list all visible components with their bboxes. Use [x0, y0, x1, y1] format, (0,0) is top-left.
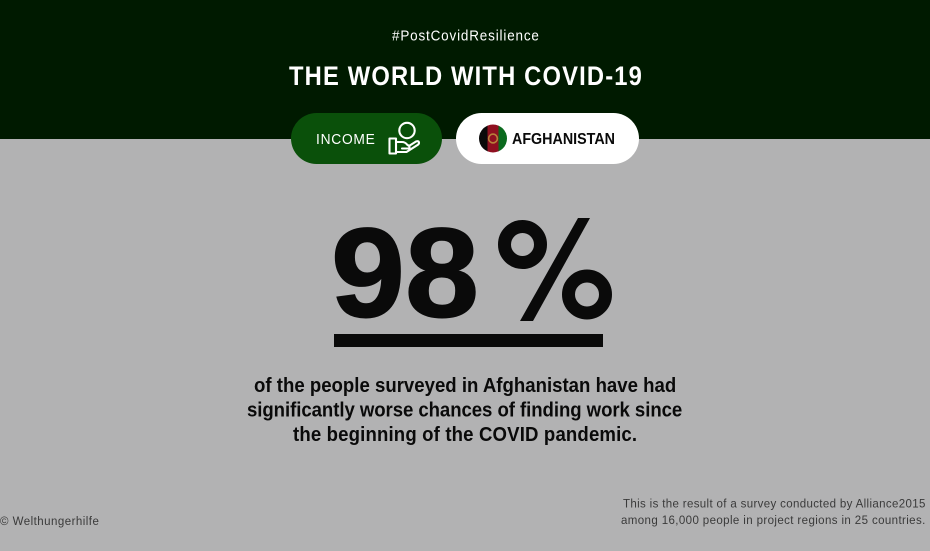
hashtag: #PostCovidResilience: [392, 27, 539, 44]
description: of the people surveyed in Afghanistan have had: [254, 375, 676, 397]
big statistic: 98: [331, 202, 479, 344]
country pill: [456, 113, 639, 164]
description: the beginning of the COVID pandemic.: [293, 424, 637, 446]
icon: hand holding coin: [390, 123, 419, 154]
description: significantly worse chances of finding work since: [247, 400, 682, 422]
source note: [621, 497, 926, 527]
statistic underline: [334, 334, 603, 347]
icon: Afghanistan flag: [479, 124, 507, 153]
title: THE WORLD WITH COVID-19: [289, 62, 642, 91]
big statistic: [331, 202, 606, 344]
header band: [0, 0, 930, 139]
country label: AFGHANISTAN: [512, 131, 615, 148]
source note: among 16,000 people in project regions in 25 countries.: [621, 514, 925, 527]
income label: INCOME: [316, 132, 375, 148]
income pill: [291, 113, 442, 164]
percent sign: [504, 218, 606, 321]
description: [247, 375, 682, 446]
copyright: © Welthungerhilfe: [0, 515, 99, 528]
source note: This is the result of a survey conducted by Alliance2015: [623, 497, 926, 511]
